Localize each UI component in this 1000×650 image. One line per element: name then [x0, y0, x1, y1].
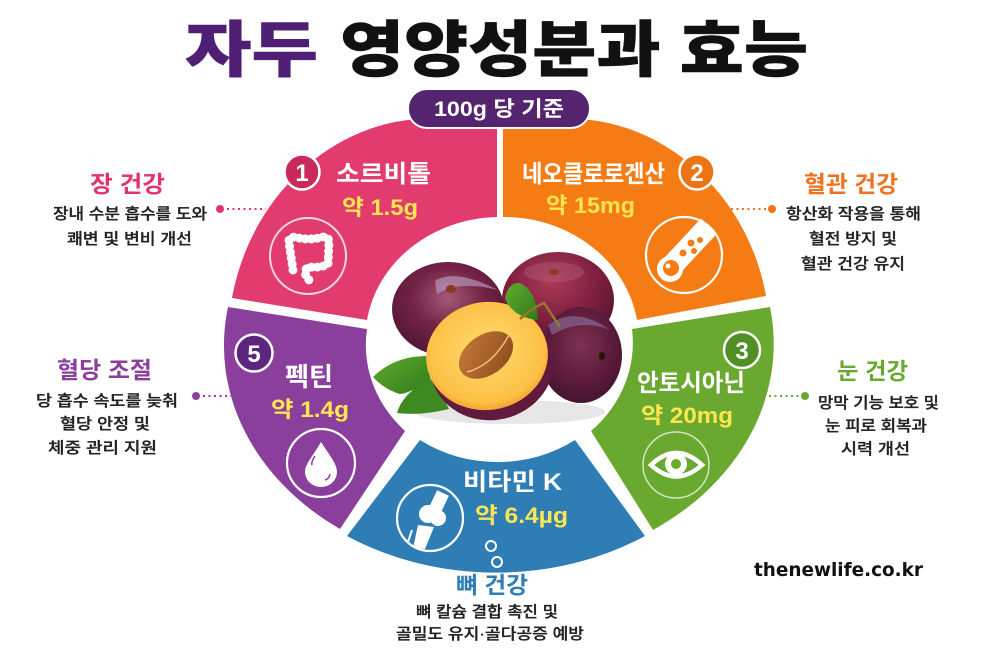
- icon: knee joint: [397, 485, 463, 551]
- amount: 약 1.5g: [342, 195, 418, 220]
- icon: water drop: [287, 429, 355, 497]
- amount: 약 20mg: [641, 403, 733, 428]
- callout: eye health: [769, 358, 939, 458]
- nutrient name: 펙틴: [285, 362, 333, 392]
- callout: eye health: 시력 개선: [841, 440, 910, 458]
- number badge 1: [284, 154, 320, 190]
- shadow: [415, 400, 605, 424]
- nutrient name: 소르비톨: [336, 161, 431, 188]
- segment: neochlorogenic acid: [503, 120, 766, 320]
- callout: gut health: 장 건강: [90, 171, 165, 197]
- number badge 3: 3: [735, 338, 749, 365]
- callout: eye health: 눈 건강: [837, 358, 908, 384]
- callout: blood sugar control: 체중 관리 지원: [48, 439, 157, 457]
- callout: blood vessel health: 혈관 건강: [804, 171, 898, 197]
- callout: blood sugar control: 당 흡수 속도를 늦춰: [36, 392, 178, 410]
- callout: eye health: 눈 피로 회복과: [825, 417, 927, 435]
- nutrient name: 네오클로로겐산: [522, 161, 665, 188]
- badge: per 100g: 100g 당 기준: [434, 98, 564, 121]
- callout: blood vessel health: 혈관 건강 유지: [801, 255, 905, 273]
- callout: eye health: 망막 기능 보호 및: [818, 394, 939, 412]
- nutrient name: 안토시아닌: [637, 370, 745, 397]
- plum: right: [540, 307, 622, 403]
- stone: [450, 321, 522, 389]
- icon: eye: [643, 432, 709, 498]
- callout: blood vessel health: 혈전 방지 및: [809, 230, 897, 248]
- plum: top right: [502, 252, 614, 348]
- item 4: vitamin K: [397, 469, 568, 567]
- icon: blood vessel: [646, 217, 722, 293]
- callout: gut health: 장내 수분 흡수를 도와: [53, 205, 207, 223]
- plum: left: [392, 262, 504, 356]
- nutrient name: 비타민 K: [463, 469, 563, 496]
- connector dots: [769, 392, 809, 400]
- donut chart: [224, 120, 774, 573]
- title: [185, 16, 808, 84]
- number badge 2: 2: [690, 160, 704, 187]
- leaf: top: [505, 283, 538, 320]
- number badge 5: [236, 334, 272, 372]
- title: 영양성분과 효능: [340, 16, 808, 84]
- title: 자두: [185, 16, 318, 84]
- callout: blood sugar control: 혈당 안정 및: [60, 415, 150, 433]
- callout: gut health: 쾌변 및 변비 개선: [67, 230, 192, 248]
- number badge 3: [724, 332, 760, 368]
- segment: pectin: [224, 307, 405, 529]
- plum half: [419, 294, 564, 432]
- illustration: plums: [373, 252, 622, 432]
- badge: per 100g: [407, 88, 591, 129]
- number badge 2: [680, 154, 714, 190]
- stem: [520, 303, 560, 327]
- callout: gut health: [53, 171, 266, 248]
- amount: 약 1.4g: [271, 397, 349, 422]
- callout: blood sugar control: [36, 357, 231, 457]
- number badge 1: 1: [295, 160, 309, 187]
- website: thenewlife.co.kr: [754, 559, 924, 581]
- segment: vitamin K: [347, 440, 645, 573]
- callout: bone health: [396, 572, 584, 643]
- segment: sorbitol: [232, 120, 497, 320]
- leaves: lower left: [373, 356, 449, 414]
- callout: blood vessel health: [731, 171, 921, 273]
- segment: anthocyanin: [591, 307, 774, 530]
- item 1: sorbitol: [270, 154, 431, 294]
- amount: 약 15mg: [546, 193, 635, 218]
- item 2: neochlorogenic acid: [522, 154, 722, 293]
- connector: [486, 541, 502, 567]
- connector dots: [192, 392, 231, 400]
- callout: bone health: 뼈 건강: [456, 572, 528, 598]
- callout: blood vessel health: 항산화 작용을 통해: [786, 205, 921, 223]
- callout: bone health: 골밀도 유지·골다공증 예방: [396, 625, 584, 643]
- item 5: pectin: [236, 334, 355, 497]
- callout: blood sugar control: 혈당 조절: [57, 357, 152, 383]
- callout: bone health: 뼈 칼슘 결합 촉진 및: [416, 603, 558, 621]
- connector dots: [216, 205, 266, 213]
- item 3: anthocyanin: [637, 332, 760, 498]
- icon: intestine: [270, 218, 346, 294]
- amount: 약 6.4µg: [475, 503, 568, 528]
- number badge 5: 5: [247, 341, 261, 368]
- connector dots: [731, 205, 776, 213]
